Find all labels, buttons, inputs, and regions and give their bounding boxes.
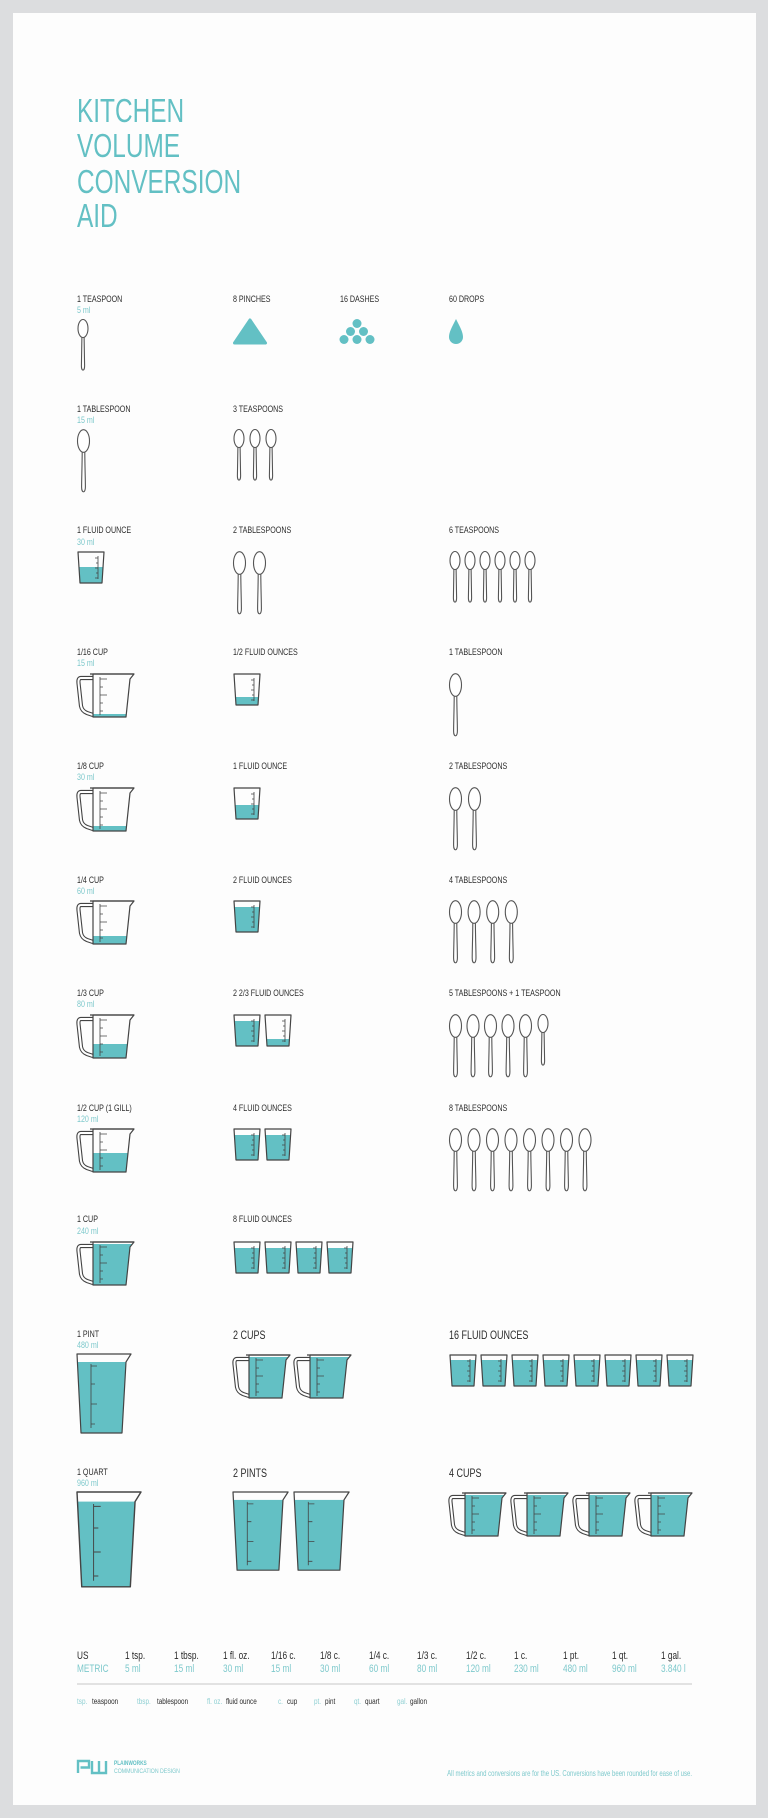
row: 1 pint: 480 ml — [77, 1339, 98, 1350]
conversion table: 1 gal. — [661, 1650, 681, 1662]
row: 1 tablespoon: 3 TEASPOONS — [233, 403, 283, 414]
conversion table: 120 ml — [466, 1663, 491, 1675]
row: 1 cup: 8 FLUID OUNCES — [233, 1213, 292, 1224]
row: 1/2 cup: 1/2 CUP (1 GILL) — [77, 1102, 132, 1113]
icon: 3 teaspoons — [234, 430, 276, 480]
row: 1 quart: 4 CUPS — [449, 1467, 481, 1480]
row: 1 pint: 2 CUPS — [233, 1329, 265, 1342]
title: VOLUME — [77, 129, 180, 165]
row: 1/4 cup: 60 ml — [77, 885, 94, 896]
icon: 2 pint beakers — [233, 1492, 349, 1571]
legend: tablespoon — [157, 1696, 188, 1706]
row: 1/4 cup — [77, 874, 517, 963]
conversion table: 1 qt. — [612, 1650, 628, 1662]
legend: c. — [278, 1696, 283, 1706]
row: 1 quart: 1 QUART — [77, 1466, 108, 1477]
row: 1 fluid ounce: 30 ml — [77, 536, 94, 547]
conversion table: 1/8 c. — [320, 1650, 340, 1662]
row: 1/4 cup: 1/4 CUP — [77, 874, 104, 885]
icon: pitcher — [77, 1129, 134, 1175]
icon: 4 cups — [233, 1242, 354, 1278]
icon: pitcher — [77, 1015, 134, 1062]
legend — [77, 1696, 427, 1706]
conversion table: 1 tbsp. — [174, 1650, 199, 1662]
row: 1 fluid ounce — [77, 524, 535, 614]
conversion table: 15 ml — [271, 1663, 291, 1675]
icon: pitcher — [77, 788, 134, 836]
icon: pitcher — [77, 901, 134, 948]
icon: 2 cups — [233, 1129, 292, 1165]
row: 1 teaspoon: 5 ml — [77, 304, 91, 315]
row: 1/4 cup: 2 FLUID OUNCES — [233, 874, 292, 885]
row: 1/8 cup: 1/8 CUP — [77, 760, 104, 771]
title — [77, 94, 241, 235]
conversion table: 1/16 c. — [271, 1650, 296, 1662]
icon: quart beaker — [77, 1492, 141, 1588]
row: 1 tablespoon: 15 ml — [77, 414, 94, 425]
row: 1 tablespoon: 1 TABLESPOON — [77, 403, 130, 414]
legend: tsp. — [77, 1696, 87, 1706]
conversion table: 30 ml — [320, 1663, 340, 1675]
row: 1 teaspoon: 60 DROPS — [449, 293, 485, 304]
legend: pt. — [314, 1696, 321, 1706]
row: 1/3 cup — [77, 987, 561, 1077]
icon: 8 cups — [449, 1355, 694, 1390]
title: AID — [77, 199, 118, 235]
legend: tbsp. — [137, 1696, 151, 1706]
icon: tablespoon — [450, 674, 462, 736]
icon: 2 tablespoons — [450, 788, 480, 850]
row: 1/3 cup: 5 TABLESPOONS + 1 TEASPOON — [449, 987, 561, 998]
row: 1 fluid ounce: 6 TEASPOONS — [449, 524, 499, 535]
conversion table: 1/3 c. — [417, 1650, 437, 1662]
row: 1/16 cup — [77, 646, 502, 736]
icon: pint beaker — [77, 1354, 131, 1434]
icon: tablespoon — [78, 430, 90, 492]
row: 1 teaspoon — [77, 293, 485, 370]
icon: 4 tablespoons — [450, 901, 517, 963]
row: 1 quart: 2 PINTS — [233, 1467, 267, 1480]
icon: pinch triangle — [234, 320, 266, 343]
conversion table: 480 ml — [563, 1663, 588, 1675]
row: 1 pint: 16 FLUID OUNCES — [449, 1329, 528, 1342]
row: 1/16 cup: 1/16 CUP — [77, 646, 108, 657]
icon: teaspoon — [78, 320, 88, 370]
row: 1 pint: 1 PINT — [77, 1328, 99, 1339]
icon: 4 pitchers — [449, 1493, 692, 1540]
icon: cup — [233, 674, 261, 709]
legend: gal. — [397, 1696, 407, 1706]
legend: quart — [365, 1696, 380, 1706]
icon: 2 pitchers — [233, 1355, 351, 1402]
conversion table: 1 pt. — [563, 1650, 579, 1662]
conversion table: 1 tsp. — [125, 1650, 145, 1662]
row: 1 quart — [77, 1466, 692, 1588]
icon: 8 tablespoons — [450, 1129, 591, 1191]
conversion table: 3.840 l — [661, 1663, 686, 1675]
legend: cup — [287, 1696, 297, 1706]
icon: cup — [233, 901, 261, 937]
legend: gallon — [410, 1696, 427, 1706]
icon: cup — [233, 788, 261, 823]
conversion table: 15 ml — [174, 1663, 194, 1675]
conversion table — [77, 1650, 686, 1675]
icon: pitcher — [77, 674, 134, 724]
conversion table: METRIC — [77, 1663, 109, 1675]
row: 1/16 cup: 1 TABLESPOON — [449, 646, 502, 657]
row: 1/3 cup: 1/3 CUP — [77, 987, 104, 998]
conversion table: 1/2 c. — [466, 1650, 486, 1662]
row: 1/16 cup: 15 ml — [77, 657, 94, 668]
row: 1/8 cup — [77, 760, 508, 850]
row: 1/3 cup: 80 ml — [77, 998, 94, 1009]
icon: 2 cups — [233, 1015, 292, 1051]
row: 1/2 cup: 4 FLUID OUNCES — [233, 1102, 292, 1113]
row: 1/2 cup: 8 TABLESPOONS — [449, 1102, 508, 1113]
conversion table: 1/4 c. — [369, 1650, 389, 1662]
row: 1/2 cup — [77, 1102, 591, 1191]
row: 1 cup: 1 CUP — [77, 1213, 98, 1224]
row: 1 tablespoon — [77, 403, 283, 492]
conversion table: 5 ml — [125, 1663, 141, 1675]
title: CONVERSION — [77, 165, 241, 201]
logo — [78, 1761, 180, 1775]
conversion table: 960 ml — [612, 1663, 637, 1675]
conversion table: 1 fl. oz. — [223, 1650, 250, 1662]
row: 1/8 cup: 30 ml — [77, 771, 94, 782]
row: 1 fluid ounce: 1 FLUID OUNCE — [77, 524, 131, 535]
icon: cup — [77, 552, 105, 587]
icon: 6 teaspoons — [450, 552, 535, 602]
legend: pint — [325, 1696, 336, 1706]
legend: fl. oz. — [207, 1696, 222, 1706]
conversion table: US — [77, 1650, 89, 1662]
row: 1/3 cup: 2 2/3 FLUID OUNCES — [233, 987, 304, 998]
row: 1/8 cup: 2 TABLESPOONS — [449, 760, 508, 771]
footnote: All metrics and conversions are for the US. Conversions have been rounded for ease of use. — [447, 1770, 692, 1778]
icon: 2 tablespoons — [234, 552, 266, 614]
title: KITCHEN — [77, 94, 184, 130]
row: 1/2 cup: 120 ml — [77, 1113, 98, 1124]
row: 1/8 cup: 1 FLUID OUNCE — [233, 760, 287, 771]
icon: spoons — [450, 1014, 548, 1077]
legend: fluid ounce — [226, 1696, 257, 1706]
row: 1 teaspoon: 16 DASHES — [340, 293, 379, 304]
conversion table: 230 ml — [514, 1663, 539, 1675]
row: 1 pint — [77, 1328, 694, 1434]
legend: teaspoon — [92, 1696, 118, 1706]
conversion table: 80 ml — [417, 1663, 437, 1675]
icon: drop — [449, 319, 463, 344]
row: 1 teaspoon: 8 PINCHES — [233, 293, 271, 304]
row: 1/16 cup: 1/2 FLUID OUNCES — [233, 646, 298, 657]
icon: dashes dots — [340, 319, 374, 344]
row: 1 cup — [77, 1213, 354, 1289]
row: 1 quart: 960 ml — [77, 1477, 98, 1488]
icon: pitcher — [77, 1242, 134, 1289]
legend: qt. — [354, 1696, 361, 1706]
conversion table: 1 c. — [514, 1650, 527, 1662]
conversion table: 60 ml — [369, 1663, 389, 1675]
conversion table: 30 ml — [223, 1663, 243, 1675]
row: 1 teaspoon: 1 TEASPOON — [77, 293, 122, 304]
logo: COMMUNICATION DESIGN — [114, 1769, 180, 1775]
row: 1/4 cup: 4 TABLESPOONS — [449, 874, 508, 885]
row: 1 fluid ounce: 2 TABLESPOONS — [233, 524, 292, 535]
row: 1 cup: 240 ml — [77, 1225, 98, 1236]
logo: PLAINWORKS — [114, 1761, 147, 1767]
